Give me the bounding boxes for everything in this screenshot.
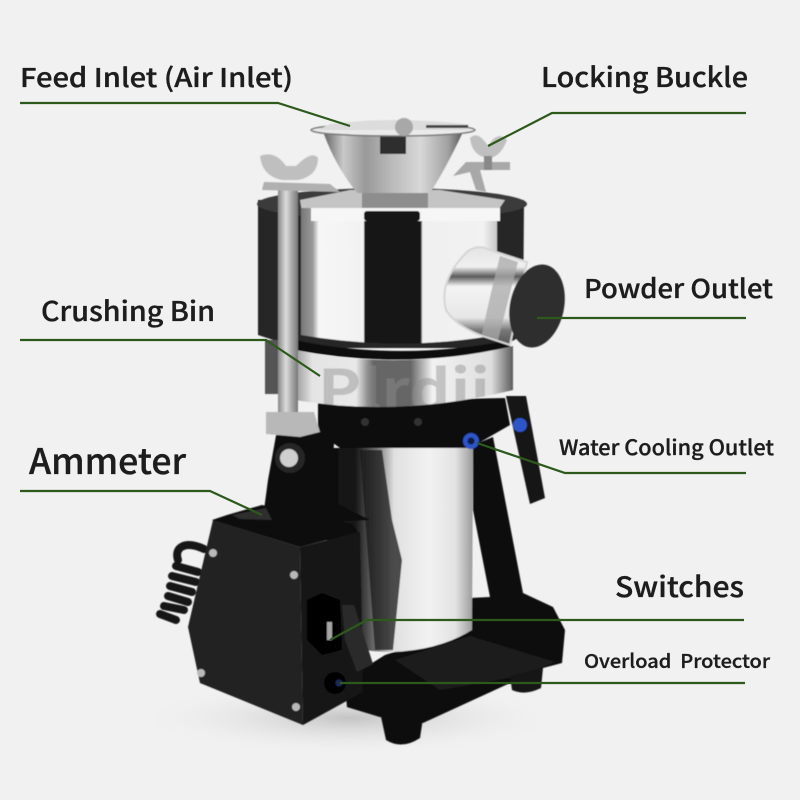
bin back body [258, 200, 524, 348]
funnel cone [324, 134, 462, 193]
handle lever [506, 396, 545, 504]
rear support strut and tray wall [470, 437, 565, 663]
label: switches: Switches [615, 566, 744, 606]
overload protector [324, 672, 346, 694]
line: overload protector [340, 682, 745, 684]
upper collar [318, 398, 510, 448]
line: locking buckle [488, 113, 746, 146]
label: ammeter: Ammeter [29, 434, 187, 485]
machine illustration [160, 118, 572, 745]
label: locking buckle: Locking Buckle [541, 56, 748, 95]
tube collar [482, 256, 518, 340]
clamp arm left [262, 182, 340, 192]
feet [380, 712, 423, 745]
leader lines [20, 103, 746, 683]
cylinder dark reflection [360, 450, 402, 650]
black seal ring [295, 340, 510, 360]
lower left shadow strip [265, 340, 297, 394]
wing nut right [470, 135, 507, 158]
power cord [160, 545, 204, 620]
outlet opening [502, 259, 572, 353]
lower motor cylinder [327, 448, 473, 652]
control box top [212, 505, 358, 547]
blue fittings [463, 433, 479, 449]
base tray inner [395, 636, 555, 690]
lower band [295, 346, 513, 407]
line: feed inlet [20, 103, 350, 126]
control box front face [188, 520, 303, 725]
base left arm [345, 668, 408, 720]
powder outlet tube [444, 247, 527, 345]
switch lever [342, 605, 373, 672]
clamp arm right [453, 162, 510, 192]
label: crushing bin: Crushing Bin [41, 290, 215, 329]
switch housing [307, 593, 342, 655]
base tray [345, 628, 562, 723]
label: overload protector: Overload Protector [584, 647, 770, 674]
line: powder outlet [537, 317, 746, 319]
switch contact [327, 622, 332, 640]
label: powder outlet: Powder Outlet [584, 269, 773, 306]
left support bracket [262, 430, 370, 525]
funnel neck [362, 192, 428, 208]
bolt [275, 443, 305, 473]
line: switches [330, 620, 744, 640]
bin steel front [301, 208, 497, 344]
line: crushing bin [20, 340, 320, 376]
bin rim [257, 188, 527, 220]
screws [197, 549, 300, 711]
label: feed inlet: Feed Inlet (Air Inlet) [20, 58, 293, 95]
clamp rod [278, 190, 298, 412]
funnel rim [311, 124, 475, 136]
clamp block [266, 412, 320, 437]
control box side face [300, 532, 363, 725]
line: water cooling outlet [477, 443, 746, 473]
wing nut left [260, 154, 318, 180]
floor shadow [135, 680, 565, 756]
line: ammeter [20, 491, 262, 515]
label: water cooling outlet: Water Cooling Outlet [559, 432, 774, 462]
watermark: Plrdii [318, 346, 490, 427]
